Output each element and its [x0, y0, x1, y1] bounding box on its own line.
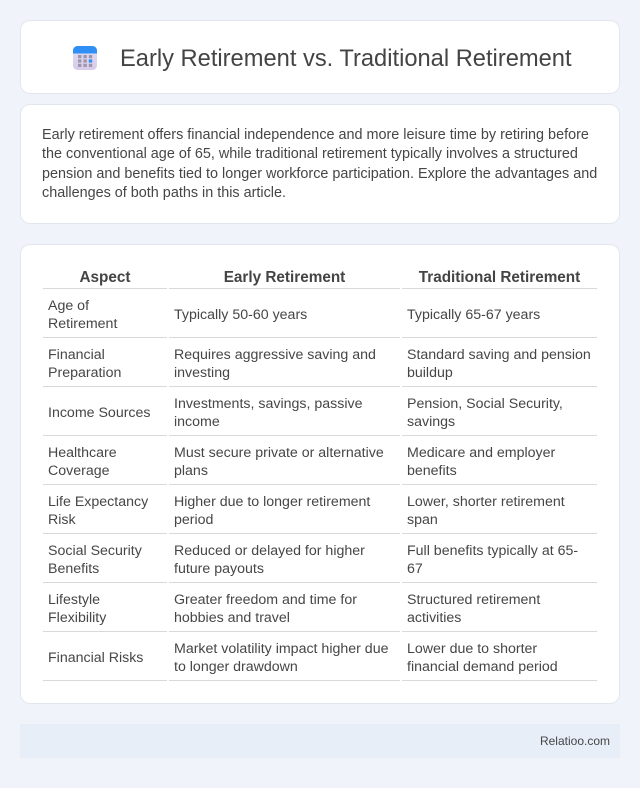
row: Life Expectancy Risk: span	[407, 512, 438, 528]
row: Lifestyle Flexibility: Lifestyle	[48, 592, 100, 608]
row: Financial Risks: Lower due to shorter	[407, 641, 537, 657]
row: Healthcare Coverage	[43, 445, 597, 485]
table header: Aspect	[79, 269, 130, 286]
row: Life Expectancy Risk: Life Expectancy	[48, 494, 148, 510]
row: Financial Risks: Market volatility impact higher due	[174, 641, 388, 657]
row: Financial Preparation: investing	[174, 365, 230, 381]
row: Lifestyle Flexibility: activities	[407, 610, 461, 626]
row: Financial Preparation: Standard saving and pension	[407, 347, 591, 363]
text block: introduction: pension and benefits tied to longer workforce participation. Explore the advantages and	[42, 166, 597, 182]
row: Financial Preparation: Financial	[48, 347, 105, 363]
row: Life Expectancy Risk	[43, 494, 597, 534]
row: Social Security Benefits: Reduced or delayed for higher	[174, 543, 365, 559]
panel: comparison table card	[20, 244, 620, 704]
row: Income Sources: Investments, savings, passive	[174, 396, 362, 412]
footer text: Relatioo.com	[540, 734, 610, 748]
text block: introduction: challenges of both paths in this article.	[42, 185, 286, 201]
row: Lifestyle Flexibility: hobbies and travel	[174, 610, 290, 626]
row: Income Sources: savings	[407, 414, 455, 430]
row: Life Expectancy Risk: Risk	[48, 512, 76, 528]
row: Financial Risks: Financial Risks	[48, 650, 143, 666]
row: Social Security Benefits: Benefits	[48, 561, 99, 577]
footer bar	[20, 724, 620, 758]
row: Healthcare Coverage: benefits	[407, 463, 457, 479]
table header: Early Retirement	[224, 269, 345, 286]
row: Healthcare Coverage: Coverage	[48, 463, 110, 479]
row: Social Security Benefits: Full benefits typically at 65-	[407, 543, 578, 559]
table header: Traditional Retirement	[419, 269, 580, 286]
panel: title card	[20, 20, 620, 94]
row: Age of Retirement: Typically 50-60 years	[174, 307, 307, 323]
panel: introduction card	[20, 104, 620, 224]
row: Healthcare Coverage: Healthcare	[48, 445, 117, 461]
row: Income Sources: income	[174, 414, 220, 430]
row: Income Sources: Income Sources	[48, 405, 151, 421]
row: Healthcare Coverage: Must secure private or alternative	[174, 445, 384, 461]
icon: calendar	[73, 46, 97, 70]
row: Age of Retirement: Age of	[48, 298, 89, 314]
row: Social Security Benefits	[43, 543, 597, 583]
row: Financial Risks: to longer drawdown	[174, 659, 298, 675]
row: Age of Retirement: Typically 65-67 years	[407, 307, 540, 323]
row: Social Security Benefits: 67	[407, 561, 423, 577]
row: Social Security Benefits: future payouts	[174, 561, 264, 577]
row: Income Sources	[43, 396, 597, 436]
row: Healthcare Coverage: Medicare and employer	[407, 445, 555, 461]
row: Income Sources: Pension, Social Security,	[407, 396, 563, 412]
row: Age of Retirement: Retirement	[48, 316, 117, 332]
comparison table	[43, 269, 597, 681]
row: Social Security Benefits: Social Security	[48, 543, 142, 559]
row: Financial Risks: financial demand period	[407, 659, 558, 675]
row: Life Expectancy Risk: period	[174, 512, 213, 528]
table header	[43, 269, 597, 289]
text block: introduction	[42, 127, 597, 201]
row: Lifestyle Flexibility: Greater freedom and time for	[174, 592, 357, 608]
row: Financial Preparation: Preparation	[48, 365, 121, 381]
row: Financial Preparation: buildup	[407, 365, 453, 381]
text block: introduction: the conventional age of 65, while traditional retirement typically involves a structured	[42, 146, 578, 162]
row: Lifestyle Flexibility: Structured retirement	[407, 592, 540, 608]
row: Financial Preparation: Requires aggressive saving and	[174, 347, 376, 363]
row: Financial Preparation	[43, 347, 597, 387]
text block: introduction: Early retirement offers financial independence and more leisure time by retiring before	[42, 127, 589, 143]
row: Lifestyle Flexibility: Flexibility	[48, 610, 106, 626]
row: Age of Retirement	[43, 298, 597, 338]
row: Healthcare Coverage: plans	[174, 463, 208, 479]
row: Life Expectancy Risk: Lower, shorter retirement	[407, 494, 565, 510]
row: Life Expectancy Risk: Higher due to longer retirement	[174, 494, 370, 510]
title: Early Retirement vs. Traditional Retirement	[120, 46, 572, 72]
